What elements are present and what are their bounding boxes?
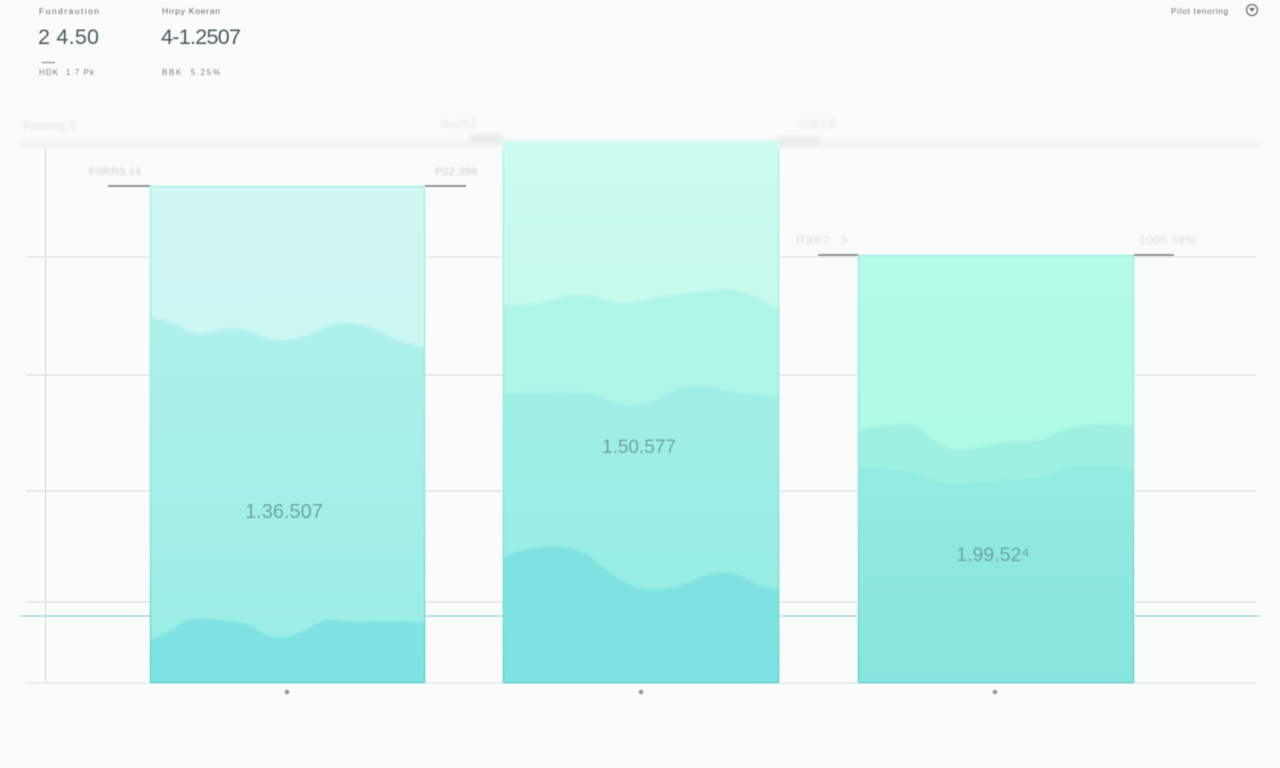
bar 3: [857, 254, 1135, 684]
chart grid and axes: [20, 134, 1260, 683]
KPI: second metric: Hirpy Koeran: [162, 6, 220, 16]
bar 1 value: 1.36.507: [245, 501, 323, 523]
bar 1: [149, 185, 426, 684]
KPI: left metric: 2 4.50: [38, 25, 99, 49]
bar 3 range labels and ticks: R9R2. 3: [796, 233, 847, 247]
KPI: left metric: [38, 6, 99, 77]
bar 3 value: 1.99.52⁴: [956, 544, 1030, 566]
KPI: second metric: [161, 6, 241, 77]
filter control and icon: [1171, 4, 1258, 16]
bar 3 waves: [858, 424, 1134, 683]
bar 2: [502, 140, 780, 684]
bar 3 range labels and ticks: 1005 59%: [1139, 233, 1196, 247]
column headings: 5583 5: [799, 117, 836, 131]
KPI: left metric: HDK 1.7 Pk: [39, 68, 95, 77]
bar 1 range labels and ticks: [89, 166, 477, 187]
bar 3 range labels and ticks: [796, 233, 1196, 256]
bar 2 outline: [504, 150, 778, 682]
KPI: second metric: BBK 5.25%: [162, 68, 220, 77]
column headings: Passing 9: [23, 119, 76, 133]
filter control and icon: Pilot tenoring: [1171, 7, 1228, 16]
bar 2 value: 1.50.577: [602, 437, 676, 458]
column headings: [23, 117, 836, 133]
bar 3 outline: [858, 256, 1134, 682]
column headings: Ro253: [441, 117, 477, 131]
bar 1 outline: [150, 186, 424, 682]
KPI: second metric: 4-1.2507: [161, 25, 241, 49]
KPI: left metric: Fundraution: [39, 6, 99, 16]
bar 1 range labels and ticks: F0RR3.14: [89, 166, 141, 178]
bar 1 range labels and ticks: P22.399: [435, 166, 477, 178]
bar 2 waves: [503, 289, 779, 683]
bar 1 waves: [150, 316, 425, 683]
x-axis markers: [285, 690, 997, 694]
